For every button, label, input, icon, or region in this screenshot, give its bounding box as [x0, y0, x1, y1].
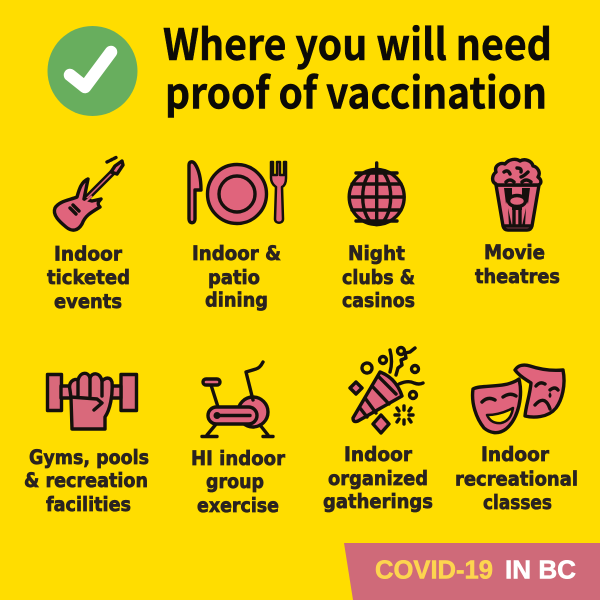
label: gyms, pools and recreation facilities: & recreation	[24, 469, 148, 492]
label: movie theatres: Movie	[484, 241, 545, 264]
title: proof of vaccination	[165, 60, 547, 122]
label: gyms, pools and recreation facilities: Gyms, pools	[29, 446, 149, 469]
icon: green check mark	[48, 26, 138, 116]
label: night clubs and casinos	[342, 242, 415, 312]
label: HI indoor group exercise	[191, 447, 285, 517]
label: indoor organized gatherings: organized	[328, 467, 428, 490]
icon: disco ball	[349, 163, 404, 224]
label: indoor and patio dining: dining	[205, 288, 268, 312]
icon: electric guitar	[54, 157, 123, 230]
label: HI indoor group exercise: exercise	[197, 494, 279, 517]
icon: party popper	[350, 348, 423, 433]
label: indoor organized gatherings: Indoor	[344, 443, 412, 466]
label: indoor organized gatherings: gatherings	[323, 490, 433, 513]
icon: plate and cutlery	[189, 162, 286, 224]
label: indoor recreational classes: recreational	[455, 468, 578, 490]
label: indoor ticketed events: events	[54, 290, 122, 313]
label: night clubs and casinos: Night	[348, 242, 405, 265]
title	[163, 11, 552, 122]
label: indoor and patio dining: patio	[208, 266, 260, 289]
label: indoor ticketed events	[47, 242, 130, 313]
icon: theatre masks	[473, 365, 564, 433]
label: indoor organized gatherings	[323, 443, 433, 513]
icon: fist holding dumbbell	[48, 373, 136, 429]
footer banner: COVID-19	[375, 554, 493, 584]
label: night clubs and casinos: clubs &	[342, 266, 415, 289]
label: indoor recreational classes: Indoor	[481, 443, 549, 466]
footer banner: IN BC	[505, 554, 576, 584]
label: indoor ticketed events: Indoor	[54, 242, 122, 266]
label: indoor recreational classes	[455, 443, 578, 514]
label: movie theatres	[475, 241, 560, 288]
label: HI indoor group exercise: group	[206, 470, 264, 493]
icon: exercise bike	[202, 362, 273, 436]
label: HI indoor group exercise: HI indoor	[191, 447, 285, 470]
label: indoor and patio dining: Indoor &	[192, 242, 281, 265]
label: movie theatres: theatres	[475, 265, 560, 288]
label: gyms, pools and recreation facilities: facilities	[46, 493, 131, 516]
label: indoor recreational classes: classes	[483, 491, 552, 514]
title: Where you will need	[163, 11, 552, 73]
label: night clubs and casinos: casinos	[342, 289, 415, 312]
icon: popcorn bucket	[493, 159, 541, 230]
label: indoor ticketed events: ticketed	[47, 266, 130, 289]
label: gyms, pools and recreation facilities	[24, 446, 149, 516]
footer banner	[344, 543, 600, 600]
label: indoor and patio dining	[192, 242, 281, 312]
